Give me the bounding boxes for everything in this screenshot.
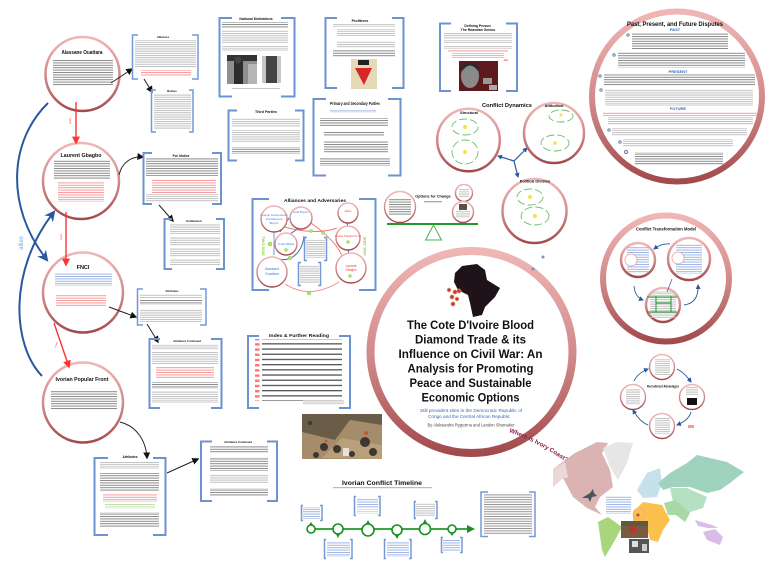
heading: Ivorian Popular Front: Ivorian Popular Front: [56, 377, 109, 383]
panel: FNCI: [43, 252, 123, 332]
panel: Conflict Dynamics: [437, 103, 584, 243]
circle: upper right option: [456, 184, 472, 202]
heading: PAST: PAST: [670, 27, 681, 32]
heading: Attributes Continued: [173, 339, 201, 343]
arrow head: [467, 525, 475, 533]
panel: Alliances and Adversaries: Ivorian Popular Front: [335, 234, 361, 238]
circle: left option: [384, 192, 416, 222]
panel: box Pol. Motive: [144, 153, 221, 204]
arrow: red Ouattara to Gbagbo: [75, 102, 77, 143]
circle: Attitudinal: Attitudinal: [545, 104, 563, 108]
node labels: Gold Buyers: [293, 210, 309, 214]
panel: Alliances and Adversaries: [252, 198, 376, 295]
heading: main title: Economic Options: [422, 392, 520, 404]
photo: soldier: [227, 55, 257, 84]
label: left side: TWO SIDE: [261, 236, 266, 256]
timeline axis: [308, 528, 468, 530]
panel: Past, Present, and Future Disputes: [592, 12, 762, 182]
node labels: Alassane: [265, 267, 279, 271]
panel: Alliances and Adversaries: Gbagbo: [345, 268, 357, 272]
cycle arrows: [633, 369, 691, 425]
panel: Laurent Gbagbo: [43, 143, 119, 219]
cycle arrows: [634, 244, 698, 305]
heading: Past, Present, and Future Disputes: [627, 22, 724, 28]
scale beam: [387, 223, 478, 225]
list: numbers: [255, 339, 260, 401]
circle: right: [680, 384, 704, 410]
panel: box FNCI attributes: [138, 289, 206, 325]
panel: main title circle: [370, 251, 572, 453]
scale fulcrum: [426, 225, 442, 240]
continent: Australia: [703, 529, 723, 545]
continent: Europe: [637, 468, 662, 498]
heading: National Motivations: National Motivations: [239, 17, 273, 21]
authors: By Aleksandra Ryguzina and Landon Shumaker: [428, 422, 515, 428]
arrow: blue allies curve to Gbagbo: [19, 212, 54, 376]
panel: box Ouattara motives: [152, 89, 193, 132]
heading: Options for Change: Options for Change: [415, 194, 451, 198]
subtitle: [424, 201, 442, 202]
heading: Alliances: [157, 35, 170, 39]
text: map note: [606, 496, 631, 514]
heading: Entitlement: [186, 219, 202, 223]
panel: Alassane Ouattara: [46, 37, 120, 111]
continent: South America: [598, 517, 622, 557]
connector: [667, 279, 672, 292]
timeline nodes: [307, 524, 456, 536]
map: where is Ivory Coast: [510, 428, 744, 557]
subtitle: sites: [420, 408, 523, 419]
label: red source: [688, 425, 694, 428]
text block: description: [51, 391, 117, 410]
icon: diamond cluster: [447, 288, 461, 306]
circle: top: [650, 354, 674, 380]
node labels: Buyers: [270, 221, 279, 225]
heading: Attributes Continued: [224, 440, 252, 444]
subtitle: [333, 487, 432, 488]
panel: Defining Person: [440, 24, 517, 91]
photo: portrait: [459, 61, 498, 91]
circle: lower right option: [452, 202, 474, 222]
heading: Primary and Secondary Parties: Primary and Secondary Parties: [330, 101, 381, 106]
circle: Political Division: [502, 179, 566, 243]
circle: Attitudinal: [524, 103, 584, 163]
label: allies: allies: [19, 236, 25, 250]
labels: red rivals: rivals: [59, 233, 63, 240]
heading: main title: Analysis for Promoting: [408, 364, 534, 376]
nodes: [261, 206, 287, 232]
icon: Ivory Coast marker: [636, 514, 640, 516]
heading: Pol. Motive: Pol. Motive: [173, 154, 190, 158]
labels: red rivals: rivals: [68, 117, 72, 124]
subtitle: sites: Still prevalent sites in the Democratic Republic of: [420, 408, 523, 413]
continent: Africa: [633, 502, 670, 542]
heading: Third Parties: Third Parties: [255, 110, 277, 114]
panel: Alliances and Adversaries: Laurent: [346, 264, 357, 268]
heading: main title: Diamond Trade & its: [415, 334, 526, 346]
bullets: [599, 34, 629, 153]
text block: biography: [53, 59, 113, 86]
label: red source: [504, 60, 508, 61]
continent: Greenland: [603, 442, 633, 480]
panel: Primary and Secondary Parties: [314, 99, 400, 176]
node labels: Ouattara: [265, 272, 279, 276]
labels: red rivals: [53, 117, 72, 348]
heading: Laurent Gbagbo: Laurent Gbagbo: [60, 153, 102, 159]
small box: [304, 238, 326, 260]
marker ring: [633, 508, 645, 520]
arrow: red Gbagbo to FNCI: [65, 212, 67, 265]
connector arrows: [498, 148, 527, 177]
heading: Alassane Ouattara: Alassane Ouattara: [62, 50, 103, 56]
decorative markers: [532, 256, 544, 270]
icon: plane: [582, 489, 597, 502]
icons: green tags: [268, 230, 352, 295]
region: Middle East and India: [664, 500, 690, 522]
list: references: [262, 339, 342, 401]
arrow: red FNCI to IPF: [54, 323, 69, 367]
circle: Political Division: Political Division: [520, 180, 551, 184]
heading: Profiteers: Profiteers: [352, 19, 368, 23]
panel: box Ouattara allies: [132, 35, 198, 79]
labels: red rivals: rivals: [53, 340, 59, 348]
panel: Options for Change: [384, 184, 478, 240]
panel: box IPF attributes: [94, 455, 166, 535]
circle: left: [620, 384, 646, 410]
heading: PRESENT: PRESENT: [669, 69, 688, 74]
text block: red quotes: [58, 181, 104, 202]
heading: main title: Influence on Civil War: An: [398, 349, 542, 361]
heading: Index & Further Reading: Index & Further Reading: [269, 333, 330, 338]
circle: stage three: [646, 288, 680, 322]
continent: Asia: [670, 488, 707, 513]
label: right side: ONE SIDE: [362, 236, 367, 256]
image: diamond emblem: [351, 59, 377, 89]
panel: box IPF attributes continued: [201, 440, 277, 501]
heading: Conflict Transformation Model: [636, 226, 696, 232]
node labels: Youth Militias: [278, 242, 295, 246]
panel: box Gbagbo entitlement: [164, 219, 224, 269]
note: [303, 400, 344, 405]
node labels: Foreign Governments: [260, 213, 288, 217]
circle: Structural: Structural: [460, 111, 478, 115]
heading: Motives: [167, 89, 177, 93]
panel: Index and Further Reading: [248, 333, 350, 408]
timeline detail box: [481, 492, 535, 536]
panel: Recruitment Advantages: [620, 354, 704, 438]
panel: Ivorian Conflict Timeline: [302, 481, 535, 558]
photo: black and white: [629, 539, 649, 553]
continent: North America: [553, 442, 613, 515]
circle: bottom: [650, 414, 674, 438]
arrow: blue allies curve to FNCI: [17, 103, 48, 260]
text block: blue description: [55, 273, 112, 286]
photo: diamond mine: [302, 414, 382, 459]
continent: Russia: [658, 455, 744, 493]
continent: Southeast Asia: [695, 520, 718, 528]
heading: Conflict Dynamics: Conflict Dynamics: [482, 103, 532, 109]
small box: [298, 262, 320, 286]
photo: soldiers: [621, 521, 648, 538]
subtitle: sites: Congo and the Central African Republic: [428, 414, 510, 419]
node pointers: [309, 519, 454, 539]
heading: Attributes: Attributes: [122, 455, 138, 459]
circle: stage two: [668, 238, 710, 280]
text block: biography: [54, 160, 110, 179]
panel: Profiteers: [326, 18, 404, 89]
panel: box FNCI attributes continued: [150, 339, 222, 408]
connectors: [274, 218, 349, 292]
heading: Recruitment Advantages: [647, 384, 679, 388]
panel: Alliances and Adversaries: Allies: [345, 209, 352, 213]
photo: second soldier: [262, 56, 281, 83]
arrows: black connectors between circles and boxes: [109, 69, 198, 473]
heading: Alliances and Adversaries: Alliances and Adversaries: [284, 198, 346, 204]
heading: main title: Peace and Sustainable: [410, 378, 532, 390]
panel: Third Parties: [228, 110, 304, 160]
path label: Where is Ivory Coast?: [509, 432, 620, 510]
heading: main title: The Cote D'Ivoire Blood: [407, 320, 534, 332]
panel: Conflict Transformation Model: [603, 216, 729, 342]
timeline event boxes: [302, 496, 462, 558]
text block: red quotes: [56, 295, 106, 307]
heading: FUTURE: FUTURE: [670, 106, 686, 111]
panel: Ivorian Popular Front: [43, 362, 123, 442]
heading: timeline title: Ivorian Conflict Timeline: [342, 481, 423, 487]
continent: Alaska: [553, 462, 568, 487]
heading: subtitle: The Rwandan Genius: [461, 28, 495, 32]
node labels: [260, 210, 309, 276]
icon: Africa silhouette: [454, 264, 500, 317]
node labels: and Diamond: [266, 217, 283, 221]
heading: FNCI: FNCI: [77, 265, 90, 271]
circle: stage one: [621, 243, 655, 277]
map: where is Ivory Coast: Where is Ivory Coast?: [510, 428, 568, 460]
circle: Structural: [437, 109, 500, 171]
heading: Defining Person: Defining Person:: [464, 24, 492, 28]
heading: Attributes: [165, 289, 179, 293]
panel: National Motivations: [220, 17, 294, 96]
heading: main title: [398, 320, 542, 404]
